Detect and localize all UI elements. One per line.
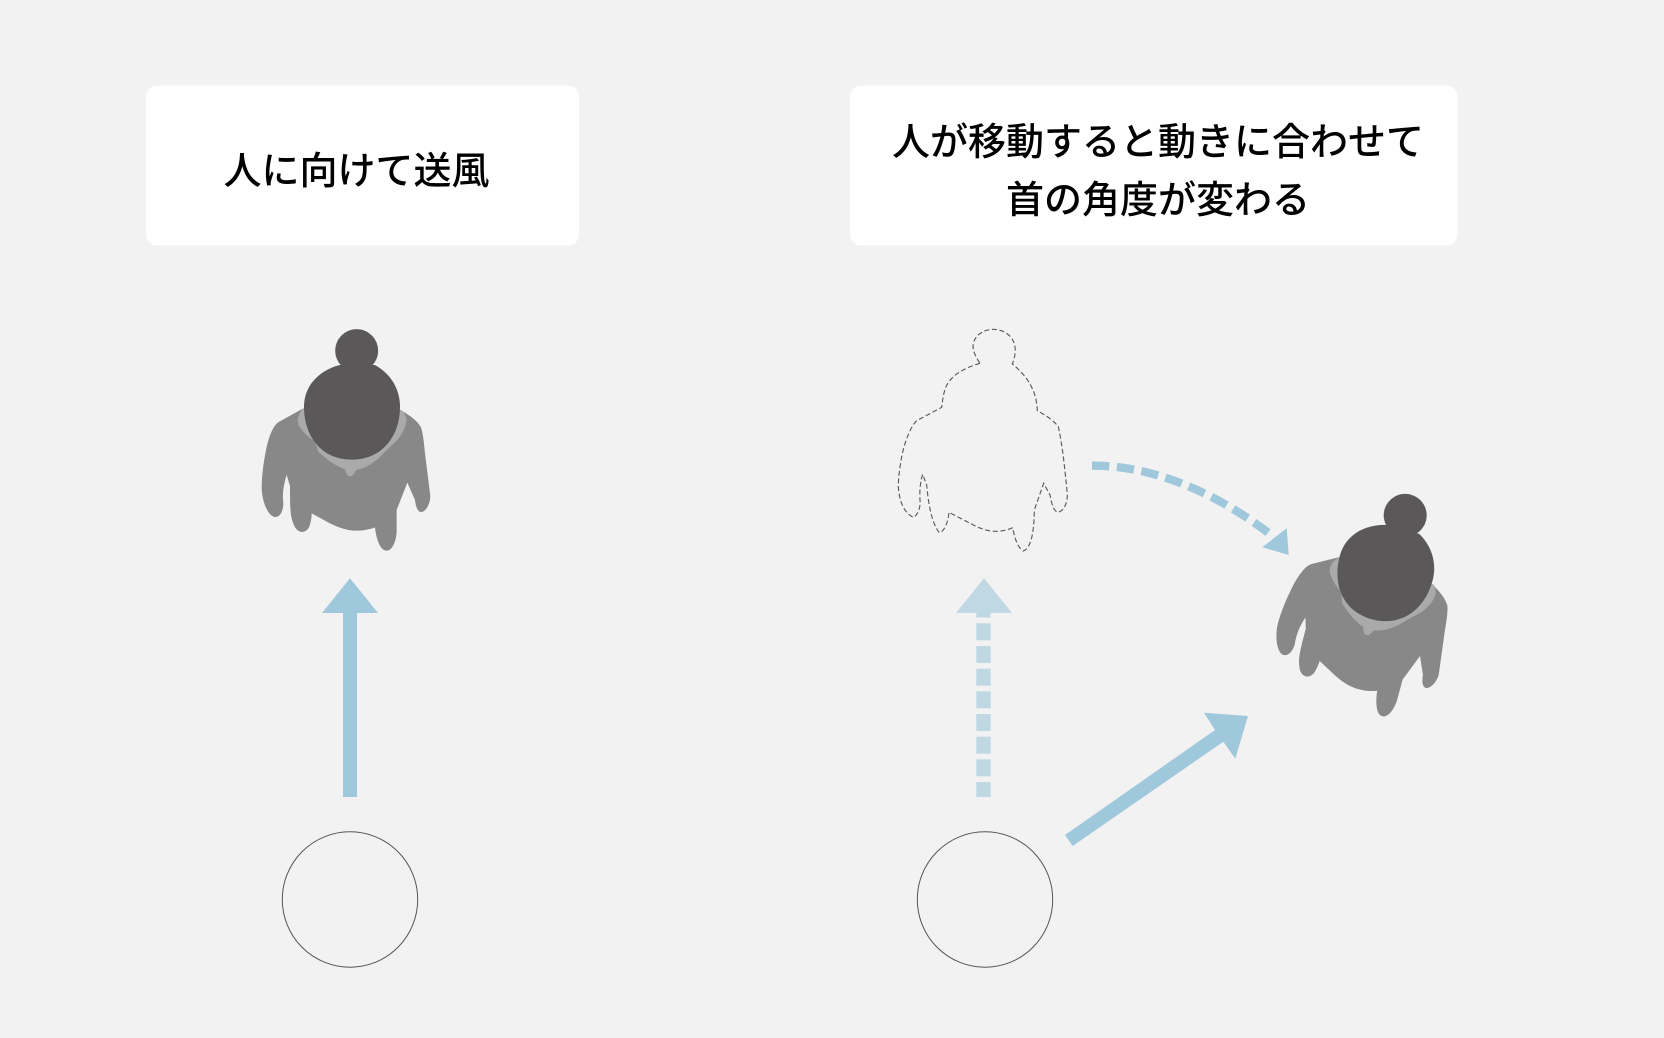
person: left, seen from above — [262, 329, 430, 551]
arrow: solid diagonal toward moved person — [1065, 713, 1248, 846]
heading: right caption text: 首の角度が変わる — [1006, 180, 1310, 222]
circle: right fan — [917, 832, 1053, 967]
panel: left caption — [146, 86, 579, 246]
collar — [298, 408, 406, 476]
hair bun — [1379, 489, 1432, 542]
arrow: solid upward — [322, 578, 378, 797]
head — [1326, 516, 1443, 632]
person: right, moved position — [1262, 470, 1482, 728]
circle: left fan — [282, 832, 418, 967]
heading: right caption text: 人が移動すると動きに合わせて — [892, 122, 1424, 164]
hair bun — [335, 329, 378, 372]
arrow: dashed curve of movement — [1092, 466, 1289, 555]
person: dashed former position outline — [898, 329, 1067, 551]
panel: right caption — [850, 86, 1458, 246]
head — [304, 365, 400, 460]
collar — [1316, 556, 1438, 650]
arrow: pale dashed upward — [956, 578, 1012, 797]
heading: left caption text: 人に向けて送風 — [223, 151, 490, 193]
